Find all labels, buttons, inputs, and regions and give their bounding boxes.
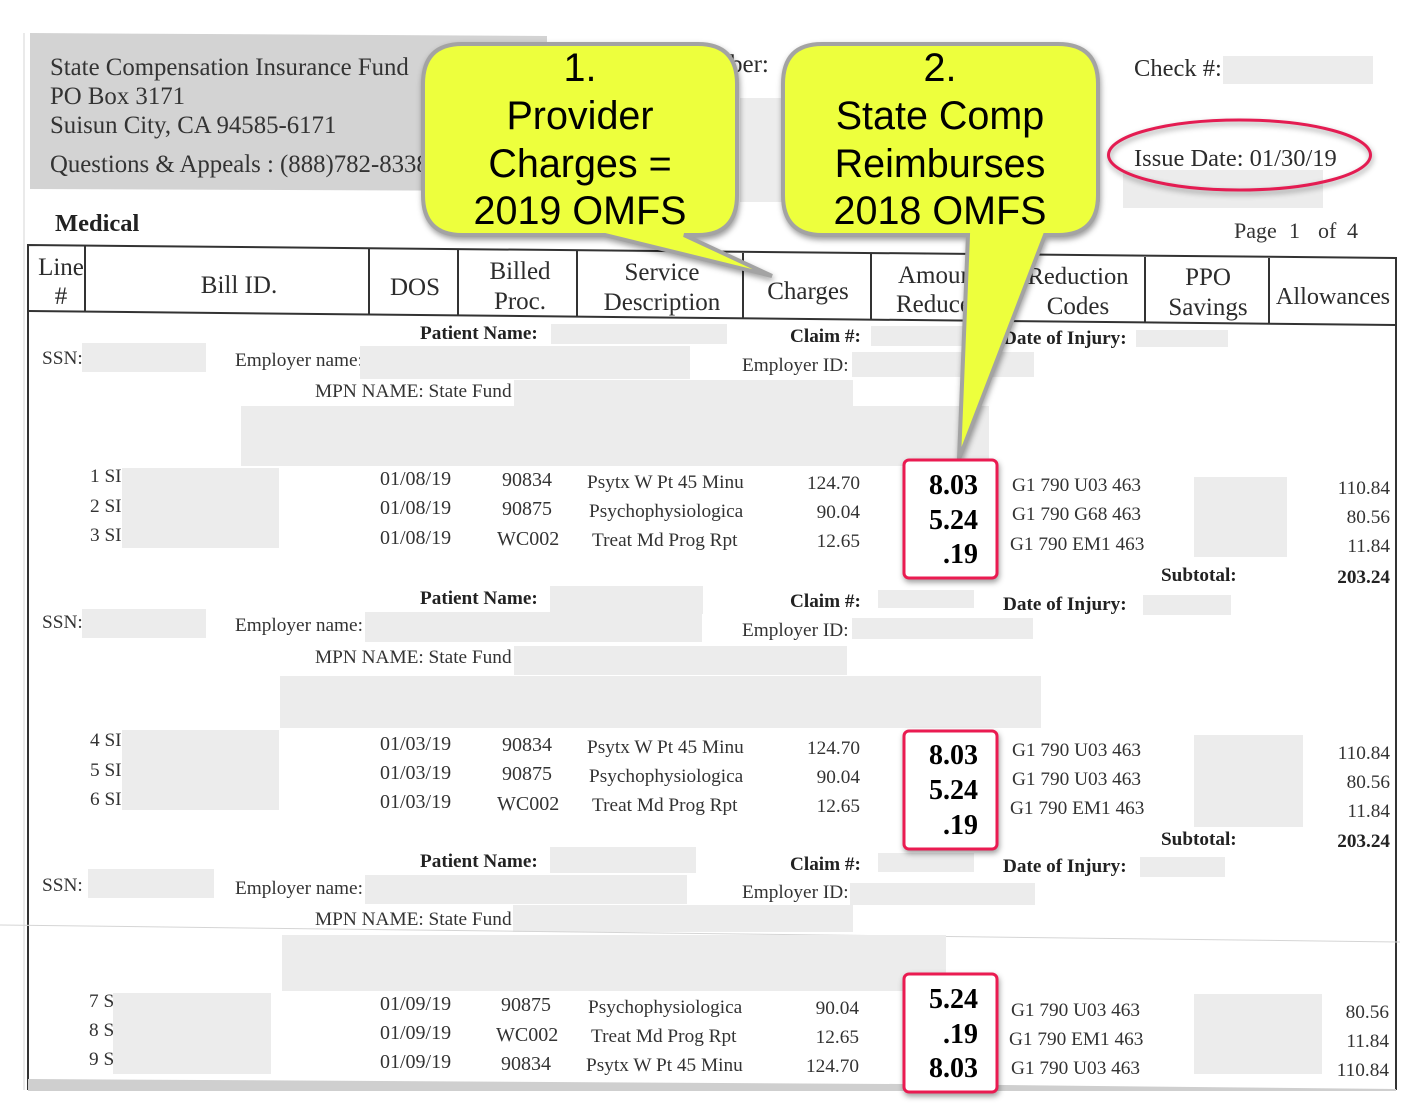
patient block 3: SSN:	[42, 875, 83, 896]
patient block 1: 01/08/19	[380, 468, 451, 490]
patient block 3: 8 S	[89, 1020, 114, 1041]
patient block 3: 01/09/19	[380, 1051, 451, 1073]
patient block 2: 110.84	[1338, 743, 1390, 764]
patient block 1: Treat Md Prog Rpt	[592, 530, 738, 551]
patient block 2: Employer ID:	[742, 620, 849, 641]
highlight box: amounts block 1: .19	[943, 539, 978, 570]
patient block 3: Patient Name:	[420, 851, 538, 872]
callout 1: provider charges: 2019 OMFS	[474, 189, 686, 233]
callout: issue date	[1108, 120, 1370, 190]
table frame and column headers: PPO	[1185, 264, 1231, 291]
patient block 2: 01/03/19	[380, 733, 451, 755]
patient block 3: 90875	[501, 994, 551, 1016]
check details header: Check #:	[1134, 55, 1222, 82]
patient block 1: 80.56	[1347, 507, 1390, 528]
patient block 1	[42, 323, 1390, 588]
patient block 2: 4 SI	[90, 730, 122, 751]
patient block 1: Employer ID:	[742, 355, 849, 376]
patient block 2: 6 SI	[90, 789, 122, 810]
patient block 1: 12.65	[817, 531, 860, 552]
patient block 3: Employer name:	[235, 878, 363, 899]
table frame and column headers: Bill ID.	[201, 272, 277, 299]
highlight box: amounts block 3: 8.03	[929, 1053, 978, 1084]
patient block 3: 80.56	[1346, 1002, 1389, 1023]
letterhead panel: State Compensation Insurance Fund	[50, 54, 409, 81]
patient block 2: MPN NAME: State Fund	[315, 647, 512, 668]
patient block 1: 90875	[502, 498, 552, 520]
patient block 3: Psytx W Pt 45 Minu	[586, 1055, 743, 1076]
callout 2: state comp reimburses: Reimburses	[835, 142, 1045, 186]
highlight box: amounts block 1	[904, 460, 997, 578]
patient block 3: G1 790 U03 463	[1011, 1000, 1140, 1021]
patient block 3: 01/09/19	[380, 1022, 451, 1044]
patient block 3: 7 S	[89, 991, 114, 1012]
patient block 2: 90875	[502, 763, 552, 785]
patient block 2: SSN:	[42, 612, 83, 633]
patient block 1: 124.70	[807, 473, 860, 494]
patient block 1: 01/08/19	[380, 527, 451, 549]
check details header: 4	[1347, 218, 1358, 243]
patient block 1: Psytx W Pt 45 Minu	[587, 472, 744, 493]
highlight box: amounts block 2: 5.24	[929, 775, 978, 806]
table frame and column headers: Service	[625, 259, 699, 286]
patient block 2: 90.04	[817, 767, 860, 788]
patient block 1: 110.84	[1338, 478, 1390, 499]
highlight box: amounts block 3: 5.24	[929, 984, 978, 1015]
table frame and column headers: Reduced	[896, 291, 984, 318]
patient block 1: 11.84	[1347, 536, 1390, 557]
patient block 2: Date of Injury:	[1003, 594, 1127, 615]
patient block 3: 110.84	[1337, 1060, 1389, 1081]
patient block 2: Claim #:	[790, 591, 861, 612]
patient block 1: 3 SI	[90, 525, 122, 546]
patient block 1: MPN NAME: State Fund	[315, 381, 512, 402]
patient block 2: 90834	[502, 734, 552, 756]
table frame and column headers: Reduction	[1027, 263, 1129, 290]
callout: issue date: Issue Date: 01/30/19	[1134, 145, 1337, 172]
table frame and column headers	[28, 245, 1396, 1090]
patient block 3: 12.65	[816, 1027, 859, 1048]
check details header: of	[1318, 218, 1337, 243]
patient block 1: 203.24	[1337, 567, 1390, 588]
patient block 2: Psychophysiologica	[589, 766, 744, 787]
patient block 1: Date of Injury:	[1003, 328, 1127, 349]
patient block 2: Treat Md Prog Rpt	[592, 795, 738, 816]
check details header: Page	[1234, 218, 1277, 243]
callout 1: provider charges: Provider	[506, 94, 654, 138]
callout 2: state comp reimburses: 2.	[924, 46, 956, 90]
patient block 3: 9 S	[89, 1049, 114, 1070]
table frame and column headers: Codes	[1047, 293, 1109, 320]
check details header: 1	[1289, 218, 1300, 243]
table frame and column headers: #	[55, 283, 68, 310]
patient block 2: 80.56	[1347, 772, 1390, 793]
patient block 3: WC002	[496, 1024, 558, 1046]
patient block 3: Date of Injury:	[1003, 856, 1127, 877]
patient block 2: G1 790 U03 463	[1012, 740, 1141, 761]
footer strip	[28, 1079, 1396, 1091]
patient block 1: G1 790 G68 463	[1012, 504, 1141, 525]
highlight box: amounts block 1: 5.24	[929, 505, 978, 536]
patient block 2: 5 SI	[90, 760, 122, 781]
table frame and column headers: Proc.	[494, 288, 546, 315]
table frame and column headers: Allowances	[1276, 283, 1390, 310]
patient block 1: G1 790 EM1 463	[1010, 534, 1144, 555]
patient block 2	[42, 586, 1390, 852]
patient block 2: 203.24	[1337, 831, 1390, 852]
patient block 1: Subtotal:	[1161, 565, 1237, 586]
patient block 1: 2 SI	[90, 496, 122, 517]
patient block 2: WC002	[497, 793, 559, 815]
patient block 2: Subtotal:	[1161, 829, 1237, 850]
patient block 2: G1 790 U03 463	[1012, 769, 1141, 790]
patient block 3: MPN NAME: State Fund	[315, 909, 512, 930]
table frame and column headers: Amount	[898, 262, 980, 289]
callout 2: state comp reimburses: 2018 OMFS	[834, 189, 1046, 233]
table frame and column headers: Billed	[489, 258, 551, 285]
patient block 3: Claim #:	[790, 854, 861, 875]
callout 1: provider charges: 1.	[564, 46, 596, 90]
letterhead panel: Suisun City, CA 94585-6171	[50, 112, 336, 139]
table frame and column headers: Charges	[767, 278, 849, 305]
patient block 3: G1 790 U03 463	[1011, 1058, 1140, 1079]
patient block 3: 90.04	[816, 998, 859, 1019]
callout 1: provider charges	[423, 44, 772, 276]
patient block 1: Claim #:	[790, 326, 861, 347]
patient block 2: Patient Name:	[420, 588, 538, 609]
patient block 3: Employer ID:	[742, 882, 849, 903]
patient block 3: 124.70	[806, 1056, 859, 1077]
check details header: ber:	[730, 51, 769, 78]
letterhead panel	[30, 33, 547, 191]
patient block 1: WC002	[497, 528, 559, 550]
patient block 3: G1 790 EM1 463	[1009, 1029, 1143, 1050]
callout 1: provider charges: Charges =	[488, 142, 672, 186]
highlight box: amounts block 3: .19	[943, 1019, 978, 1050]
patient block 1: 1 SI	[90, 466, 122, 487]
patient block 2: 12.65	[817, 796, 860, 817]
patient block 2: 01/03/19	[380, 762, 451, 784]
patient block 1: G1 790 U03 463	[1012, 475, 1141, 496]
patient block 1: Employer name:	[235, 350, 363, 371]
patient block 2: 124.70	[807, 738, 860, 759]
table frame and column headers: Line	[38, 254, 84, 281]
patient block 2: 01/03/19	[380, 791, 451, 813]
patient block 3: 90834	[501, 1053, 551, 1075]
section heading: Medical: Medical	[55, 210, 140, 237]
patient block 1: 90834	[502, 469, 552, 491]
table frame and column headers: Description	[604, 289, 721, 316]
patient block 1: 90.04	[817, 502, 860, 523]
callout 2: state comp reimburses	[783, 44, 1098, 459]
patient block 3	[0, 847, 1400, 1081]
patient block 1: SSN:	[42, 348, 83, 369]
patient block 3: 11.84	[1346, 1031, 1389, 1052]
table frame and column headers: DOS	[390, 274, 440, 301]
letterhead panel: Questions & Appeals : (888)782-8338	[50, 151, 429, 178]
highlight box: amounts block 1: 8.03	[929, 470, 978, 501]
check details header	[730, 51, 1373, 243]
patient block 2: Employer name:	[235, 615, 363, 636]
highlight box: amounts block 2: 8.03	[929, 740, 978, 771]
patient block 2: Psytx W Pt 45 Minu	[587, 737, 744, 758]
patient block 1: Psychophysiologica	[589, 501, 744, 522]
table frame and column headers: Savings	[1168, 294, 1248, 321]
patient block 3: Treat Md Prog Rpt	[591, 1026, 737, 1047]
patient block 2: 11.84	[1347, 801, 1390, 822]
highlight box: amounts block 2: .19	[943, 810, 978, 841]
callout 2: state comp reimburses: State Comp	[836, 94, 1044, 138]
letterhead panel: PO Box 3171	[50, 83, 185, 110]
patient block 3: 01/09/19	[380, 993, 451, 1015]
patient block 2: G1 790 EM1 463	[1010, 798, 1144, 819]
patient block 1: 01/08/19	[380, 497, 451, 519]
patient block 3: Psychophysiologica	[588, 997, 743, 1018]
highlight box: amounts block 3	[904, 974, 997, 1092]
patient block 1: Patient Name:	[420, 323, 538, 344]
highlight box: amounts block 2	[904, 731, 997, 849]
